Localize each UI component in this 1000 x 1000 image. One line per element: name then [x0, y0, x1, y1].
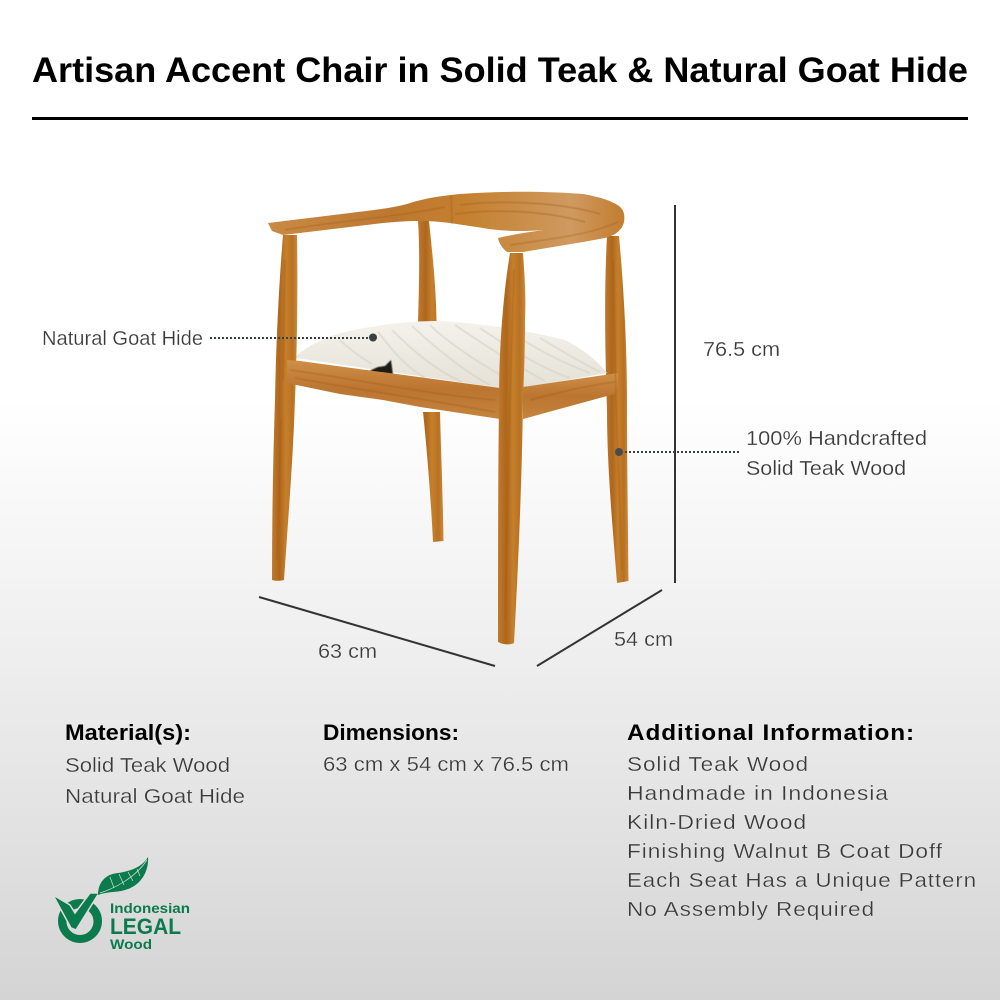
additional information block: Finishing Walnut B Coat Doff [627, 841, 943, 863]
logo wordmark: LEGAL [110, 914, 181, 939]
additional information block: Kiln-Dried Wood [627, 812, 807, 834]
additional information block: Additional Information: [627, 720, 915, 745]
icon: ring and check mark [53, 893, 102, 943]
dimension: height: 76.5 cm [703, 339, 780, 361]
materials block: Material(s): [65, 720, 191, 745]
additional information block [627, 720, 977, 921]
callout: natural goat hide [42, 328, 377, 350]
icon: leaf [98, 857, 148, 895]
callout: handcrafted teak: 100% Handcrafted [746, 428, 927, 450]
additional information block: Solid Teak Wood [627, 754, 809, 776]
materials block [65, 720, 245, 808]
logo wordmark: Indonesian [110, 900, 190, 916]
materials block: Solid Teak Wood [65, 755, 230, 777]
back leg [418, 221, 444, 542]
dimensions block: 63 cm x 54 cm x 76.5 cm [323, 754, 569, 776]
logo wordmark: Wood [110, 936, 152, 952]
chair photo [268, 192, 628, 644]
dimensions block: Dimensions: [323, 720, 459, 745]
front leg [498, 253, 525, 644]
wood grain on backrest, frame and legs [277, 196, 622, 620]
dimension: width: 63 cm [318, 641, 377, 663]
callout: natural goat hide: Natural Goat Hide [42, 328, 203, 350]
additional information block: No Assembly Required [627, 899, 875, 921]
dimension: depth [537, 590, 673, 666]
rear right leg [605, 236, 628, 583]
seat frame side [523, 373, 618, 419]
materials block: Natural Goat Hide [65, 786, 245, 808]
additional information block: Handmade in Indonesia [627, 783, 889, 805]
dimensions block [323, 720, 569, 776]
additional information block: Each Seat Has a Unique Pattern [627, 870, 977, 892]
curved backrest and arms [268, 192, 624, 252]
dimension: depth: 54 cm [614, 629, 673, 651]
logo: Indonesian Legal Wood [53, 857, 190, 952]
hide grain and black patch [340, 325, 600, 386]
dimension: width [259, 597, 495, 666]
seat frame front [287, 360, 500, 419]
title: Artisan Accent Chair in Solid Teak & Natural Goat Hide [32, 50, 968, 90]
callout: handcrafted teak: Solid Teak Wood [746, 458, 906, 480]
callout: handcrafted teak [615, 428, 927, 480]
seat cushion: goat hide [296, 321, 607, 388]
logo wordmark [110, 900, 190, 952]
rear left leg [272, 235, 297, 581]
